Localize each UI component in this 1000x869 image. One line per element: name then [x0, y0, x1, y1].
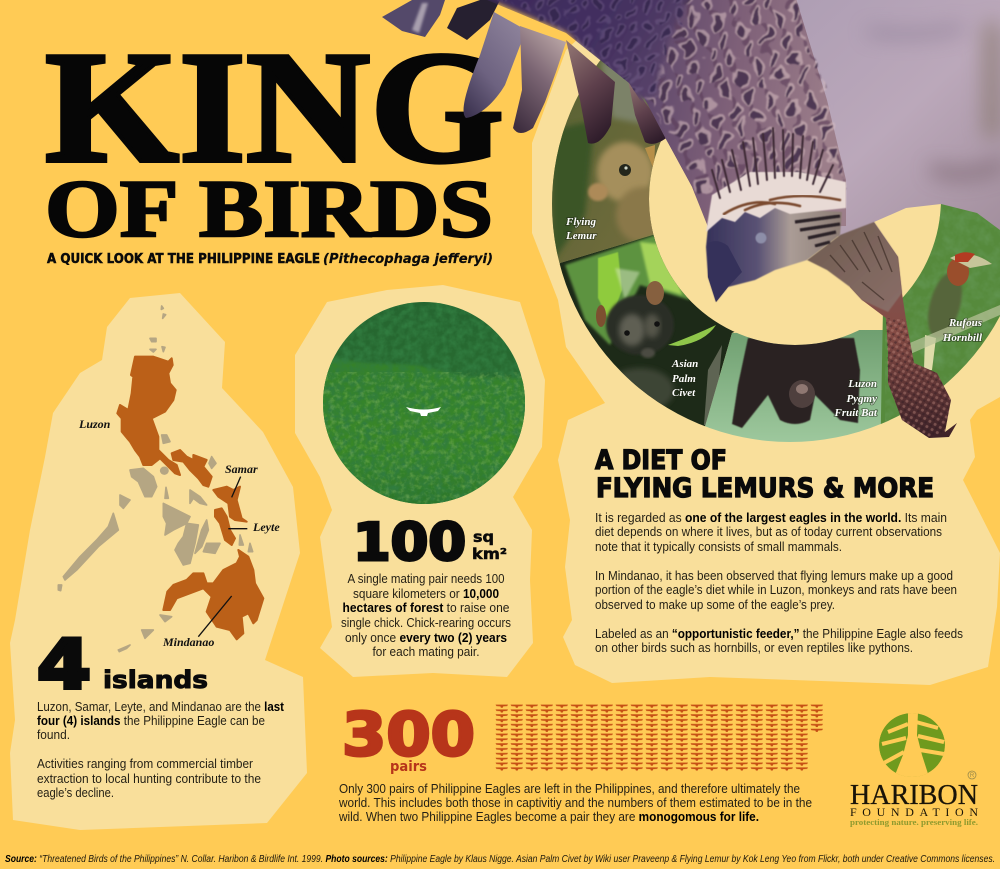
text: diet description: In Mindanao, it has been observed that flying lemurs make up a good [595, 569, 953, 583]
photo labels: Rufous [948, 317, 982, 329]
eagle: leg and talon [840, 223, 957, 438]
photo: flying lemur [552, 60, 661, 264]
map: Mindanao [163, 550, 263, 639]
map: Samar [213, 487, 247, 522]
eagle: beak [708, 241, 742, 302]
forest photo with eagle silhouette [320, 302, 530, 510]
stat: 300 pairs: pairs [390, 759, 427, 775]
photo labels: Luzon [847, 378, 877, 390]
heading: diet [595, 445, 934, 504]
map: other islands [58, 306, 253, 652]
logo: wordmark: HARIBON [850, 779, 978, 811]
photo labels: Hornbill [942, 332, 983, 344]
text: islands description: four (4) islands the Philippine Eagle can be [37, 714, 265, 728]
stat: 300 pairs: 300 [342, 700, 475, 770]
eagle: white crest streaks [706, 128, 846, 232]
text: forest requirement: for each mating pair. [372, 645, 480, 659]
stat: 4 islands: 4 [37, 626, 91, 705]
text: diet description: diet depends on where it lives, but as of today current observations [595, 525, 942, 539]
map: Bicol [172, 450, 212, 487]
panel: forest range [295, 285, 545, 677]
text: forest requirement: hectares of forest to raise one [342, 601, 510, 615]
eagle: body shading [870, 28, 1000, 174]
text: forest requirement [341, 572, 511, 659]
map: leader lines [198, 477, 247, 637]
photo: rufous hornbill [880, 204, 1000, 424]
text: islands description [37, 700, 285, 800]
stat: 4 islands: islands [103, 666, 208, 694]
text: forest requirement: A single mating pair needs 100 [348, 572, 505, 586]
eagle: eye [756, 232, 766, 244]
photo labels: Fruit Bat [834, 407, 878, 419]
eagle: wing tip feathers [382, 0, 500, 40]
eagle: body silhouette [720, 0, 1000, 257]
text: diet description: portion of the eagle’s diet while in Luzon, monkeys and rats have been [595, 583, 957, 597]
logo: wordmark: FOUNDATION [850, 805, 978, 819]
photo labels: Flying [565, 216, 596, 228]
text: forest requirement: square kilometers or 10,000 [353, 587, 499, 601]
text: islands description: Activities ranging from commercial timber [37, 757, 253, 771]
map: Leyte [215, 508, 235, 545]
logo: registered mark: R [970, 773, 975, 779]
map labels: Leyte [252, 520, 280, 534]
photo labels: Pygmy [846, 393, 877, 405]
panel: islands map [10, 293, 307, 830]
stat: 100 sq km: 100 [353, 513, 466, 573]
map: Luzon [117, 357, 180, 475]
text: forest requirement: single chick. Chick-rearing occurs [341, 616, 511, 630]
eagle [382, 0, 1000, 438]
logo: leaf emblem [879, 712, 945, 780]
text: islands description: Luzon, Samar, Leyte, and Mindanao are the last [37, 700, 285, 714]
text: diet description: Labeled as an “opportunistic feeder,” the Philippine Eagle also feeds [595, 627, 963, 641]
text: diet description: It is regarded as one of the largest eagles in the world. Its main [595, 511, 947, 525]
photo labels: Civet [672, 387, 696, 399]
heading: diet: FLYING LEMURS & MORE [596, 473, 934, 504]
stat: 100 sq km: km² [472, 545, 507, 563]
stat: 100 sq km: sq [473, 528, 494, 546]
photo: luzon pygmy fruit bat [705, 330, 900, 442]
text: diet description [595, 511, 963, 655]
title: KING [45, 18, 504, 196]
icon: white eagle [406, 407, 441, 416]
text: diet description: on other birds such as hornbills, or even reptiles like pythons. [595, 641, 913, 655]
eagle: finger feather 3 [566, 40, 615, 144]
icon grid: 300 eagle pairs [495, 703, 825, 771]
text: islands description: eagle’s decline. [37, 786, 114, 800]
subtitle [47, 252, 493, 267]
photo: asian palm civet [560, 234, 735, 426]
photo ring: prey animals [552, 60, 1000, 442]
text: islands description: extraction to local hunting contribute to the [37, 772, 261, 786]
eagle: head [706, 208, 842, 302]
map labels: Samar [225, 462, 258, 476]
eagle: wing and neck feathers [470, 0, 848, 228]
map labels: Luzon [78, 417, 111, 431]
text: 300 pairs description: world. This includes both those in captivitiy and the numbers of them estimated to be in the [338, 796, 812, 810]
eagle: chest feathers [807, 222, 902, 312]
text: 300 pairs description: Only 300 pairs of Philippine Eagles are left in the Philippines, and therefore ultimately the [339, 782, 800, 796]
stat: 4 islands [37, 626, 208, 705]
logo: wordmark: protecting nature. preserving life. [850, 818, 978, 827]
logo: wordmark [850, 779, 978, 827]
heading: diet: A DIET OF [595, 445, 727, 476]
map labels [78, 417, 280, 649]
text: diet description: note that it typically consists of small mammals. [595, 540, 842, 554]
title: OF BIRDS [45, 163, 493, 254]
photo labels: Lemur [565, 230, 597, 242]
map of the Philippines [58, 306, 263, 652]
text: 300 pairs description [338, 782, 812, 824]
subtitle: (Pithecophaga jefferyi) [323, 252, 493, 267]
panel: diet [532, 0, 1000, 685]
photo labels: Palm [672, 373, 696, 385]
photo labels: Asian [671, 358, 698, 370]
text: islands description: found. [37, 728, 70, 742]
eagle: finger feather 2 [513, 26, 566, 133]
eagle: finger feather 4 [628, 80, 670, 144]
text: forest requirement: only once every two (2) years [345, 631, 507, 645]
map labels: Mindanao [162, 635, 214, 649]
photo labels [565, 216, 983, 419]
text: 300 pairs description: wild. When two Philippine Eagles become a pair they are monogomous for life. [338, 810, 759, 824]
eagle: finger feather 1 [464, 12, 526, 118]
logo: Haribon Foundation [850, 712, 978, 827]
subtitle: A QUICK LOOK AT THE PHILIPPINE EAGLE [47, 252, 320, 267]
text: diet description: observed to make up some of the eagle’s prey. [595, 598, 835, 612]
